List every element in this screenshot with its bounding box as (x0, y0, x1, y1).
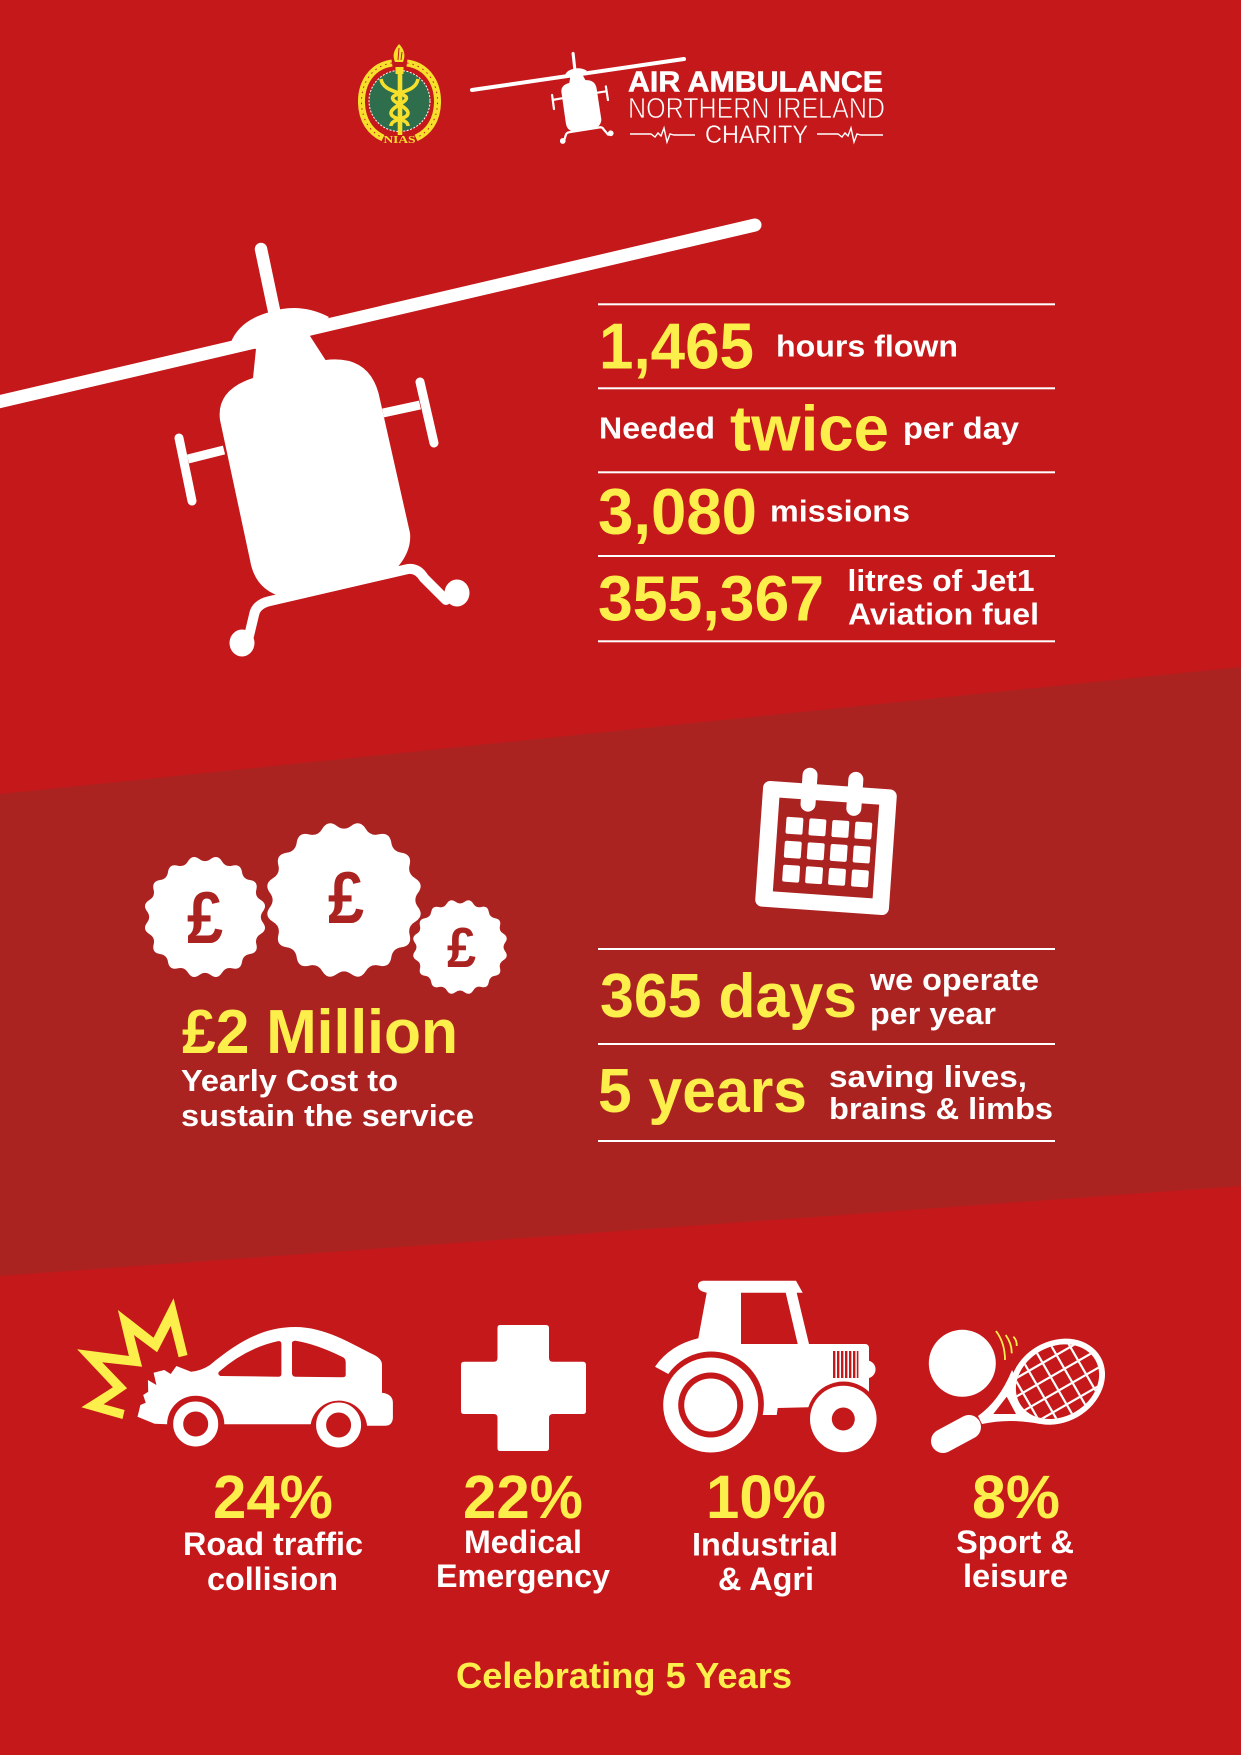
stat: 365 days: per year (870, 996, 996, 1031)
stat: road traffic collision: Road traffic (183, 1526, 363, 1562)
stat: hours flown (599, 309, 958, 382)
stat: sport and leisure: leisure (963, 1558, 1068, 1594)
stat: sport and leisure (956, 1463, 1074, 1594)
stat: needed twice per day: per day (903, 410, 1020, 445)
stat: 5 years: 5 years (598, 1057, 807, 1126)
icon: crashed car (77, 1298, 393, 1442)
stat: 5 years: saving lives, (829, 1059, 1027, 1094)
stat: road traffic collision (183, 1463, 363, 1597)
stat: litres of fuel: 355,367 (598, 563, 824, 635)
stat: litres of fuel: litres of Jet1 (848, 563, 1034, 598)
stat: road traffic collision: collision (207, 1561, 338, 1597)
logo: medical emblem: NIAS (384, 134, 416, 146)
icon: calendar (755, 765, 898, 916)
text: yearly cost: Yearly Cost to (181, 1063, 398, 1098)
stat: 5 years (598, 1057, 1053, 1126)
text: yearly cost (181, 998, 474, 1133)
stat: needed twice per day (599, 393, 1020, 465)
logo: small helicopter (472, 52, 684, 147)
stat: medical emergency: Emergency (436, 1558, 610, 1594)
panel: flight statistics (598, 303, 1055, 642)
large helicopter illustration (0, 225, 755, 656)
stat: sport and leisure: Sport & (956, 1524, 1074, 1560)
stat: sport and leisure: 8% (972, 1463, 1060, 1531)
text: yearly cost: £2 Million (182, 998, 458, 1067)
stat: industrial and agri: Industrial (692, 1527, 838, 1563)
stat: industrial and agri: 10% (706, 1463, 826, 1531)
stat: road traffic collision: 24% (213, 1463, 333, 1531)
stat: needed twice per day: Needed (599, 410, 715, 445)
stat: industrial and agri: & Agri (718, 1561, 814, 1597)
stat: litres of fuel: Aviation fuel (848, 596, 1039, 631)
stat: missions (598, 475, 910, 548)
logo: medical emblem (361, 44, 438, 146)
stat: hours flown: hours flown (776, 329, 958, 364)
stat: medical emergency (436, 1463, 610, 1594)
stat: hours flown: 1,465 (599, 309, 754, 382)
stat: 365 days: we operate (869, 962, 1039, 997)
icon: medical cross (461, 1325, 586, 1451)
dark diagonal band (0, 667, 1241, 1276)
stat: 5 years: brains & limbs (829, 1091, 1053, 1126)
stat: needed twice per day: twice (730, 393, 889, 465)
logo: wordmark: AIR AMBULANCE (628, 67, 883, 99)
coin: centre: £ (328, 858, 364, 939)
stat: 365 days: 365 days (600, 962, 857, 1031)
stat: 365 days (600, 962, 1039, 1031)
stat: missions: 3,080 (598, 475, 757, 548)
text: yearly cost: sustain the service (181, 1098, 474, 1133)
stat: medical emergency: 22% (463, 1463, 583, 1531)
logo: wordmark: CHARITY (705, 121, 808, 149)
stat: industrial and agri (692, 1463, 838, 1597)
footer: celebrating 5 years: Celebrating 5 Years (456, 1655, 792, 1696)
coin: right (408, 895, 512, 999)
stat: litres of fuel (598, 563, 1039, 635)
coin: left (139, 851, 271, 983)
panel: service statistics (598, 948, 1055, 1142)
stat: missions: missions (770, 494, 910, 529)
stat: medical emergency: Medical (464, 1524, 582, 1560)
icon: ball and tennis racket (928, 1330, 1105, 1453)
icon: tractor (655, 1281, 877, 1452)
coin: left: £ (187, 878, 223, 959)
logo: wordmark (628, 67, 885, 149)
coin: right: £ (447, 916, 476, 980)
logo: wordmark: NORTHERN IRELAND (628, 93, 885, 125)
icon: pound coins (139, 815, 512, 999)
coin: centre (259, 815, 429, 985)
